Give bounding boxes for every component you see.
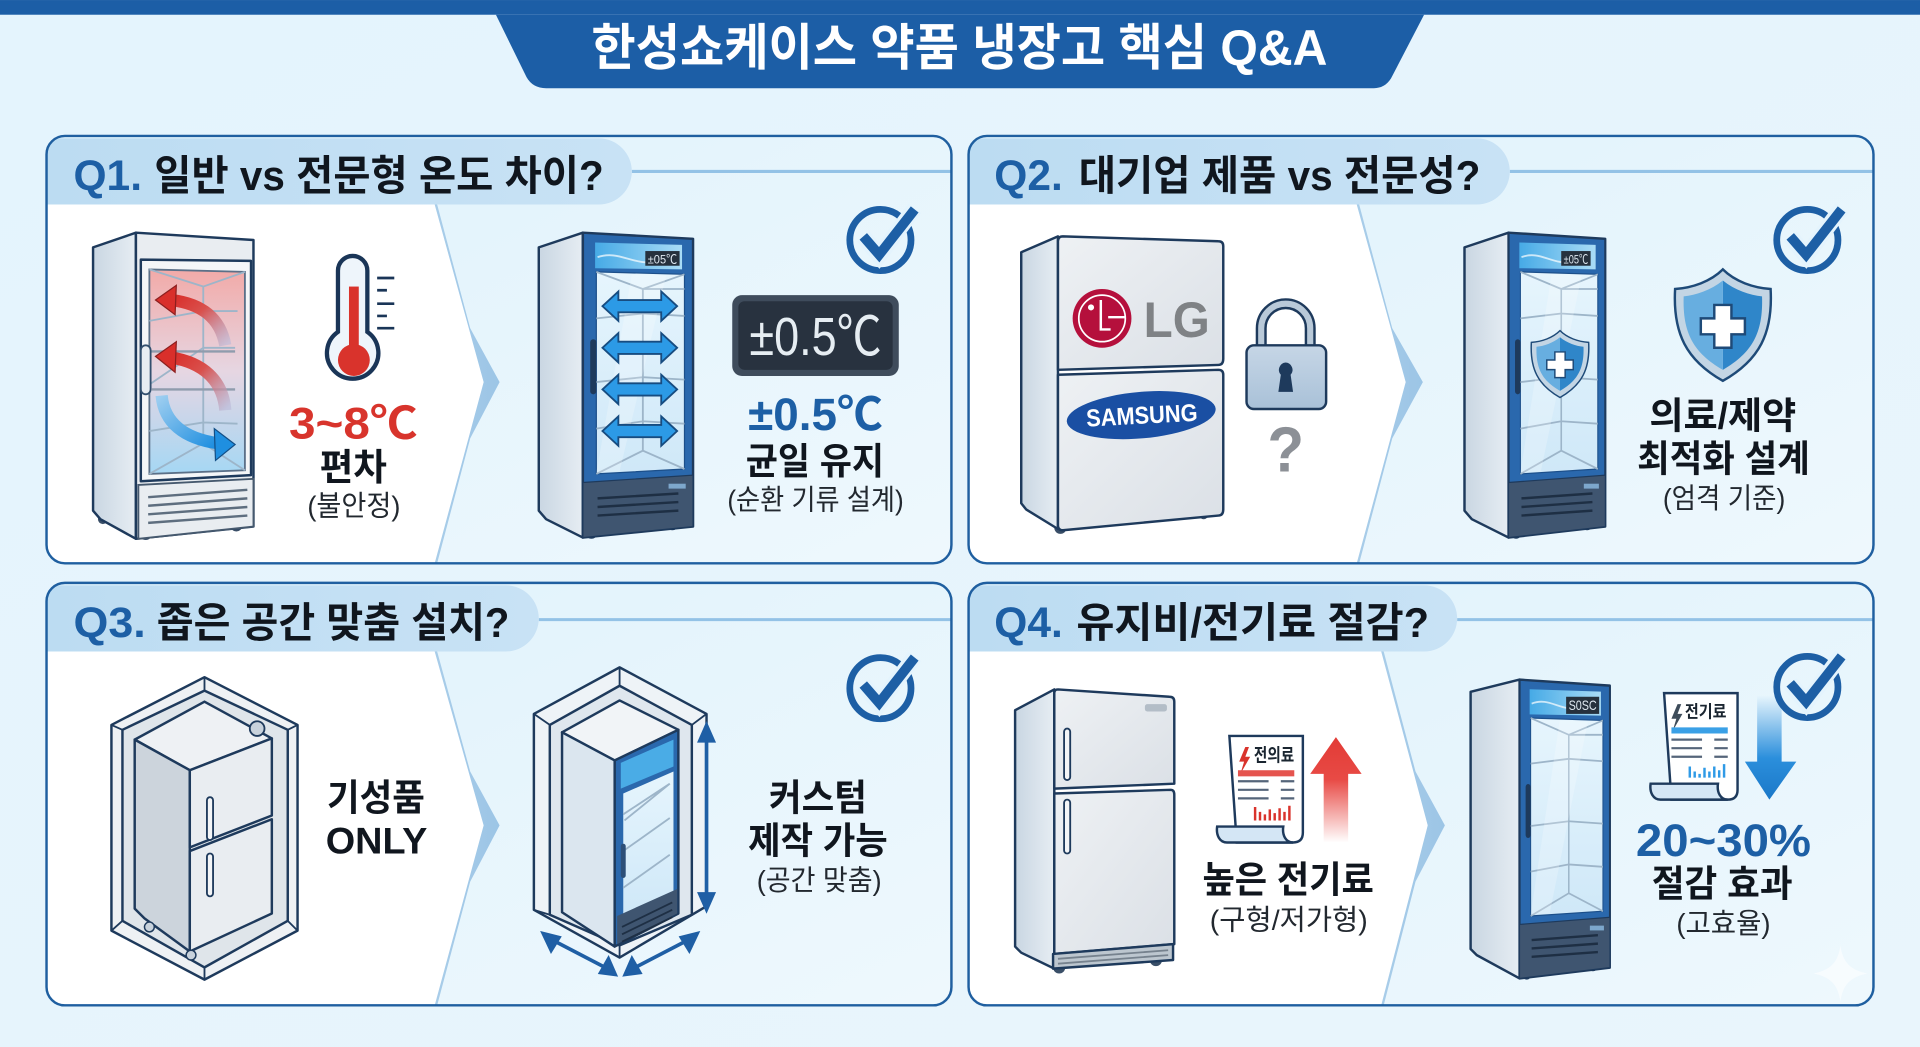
Q4 heading: 유지비/전기료 절감? (1076, 599, 1429, 646)
pharmaceutical fridge with shield (1464, 233, 1605, 539)
panel: Q2 (969, 136, 1873, 563)
right label: savings: (고효율) (1676, 908, 1771, 939)
icon: medical shield (1675, 269, 1771, 381)
left label: temperature deviation: 3~8℃ (289, 399, 418, 448)
arrow: falling cost (1745, 696, 1796, 800)
Q2 heading: Q2. (994, 152, 1063, 200)
icon: check mark (850, 208, 915, 271)
icon: check mark (850, 656, 915, 719)
high-efficiency pharmaceutical fridge: S0SC (1569, 698, 1597, 713)
airflow arrows (156, 285, 235, 460)
LG logo: LG (1144, 292, 1210, 348)
right label: medical optimized design (1637, 396, 1810, 514)
Samsung logo: SAMSUNG (1086, 400, 1198, 433)
right label: uniform temperature: ±0.5℃ (748, 389, 883, 440)
Q3 heading: Q3. (73, 599, 146, 647)
arrow: rising cost (1310, 737, 1362, 842)
digital display: ±0.5℃ (749, 307, 882, 367)
dimension arrows (541, 722, 715, 976)
icon: high electricity bill (1217, 736, 1303, 842)
panel: Q1 (47, 136, 951, 563)
icon: check mark (1777, 655, 1842, 718)
panel: Q4 (969, 583, 1873, 1005)
general fridge with uneven airflow (93, 233, 253, 540)
icon: lock with question mark (1247, 304, 1326, 485)
pharmaceutical fridge with even airflow (539, 233, 693, 539)
Q1 heading: Q1. (73, 152, 142, 200)
left label: off-the-shelf only (326, 778, 427, 862)
left label: temperature deviation: 편차 (320, 447, 387, 488)
right label: custom manufacturing: 커스텀 (769, 778, 867, 819)
icon: high electricity bill: 전의료 (1254, 745, 1294, 766)
right label: uniform temperature (727, 389, 904, 515)
icon: lock with question mark: ? (1267, 414, 1304, 485)
icon: thermometer (327, 256, 394, 379)
Q2 heading: 대기업 제품 vs 전문성? (1079, 152, 1480, 199)
right label: uniform temperature: (순환 기류 설계) (727, 484, 904, 515)
left label: high electricity cost: (구형/저가형) (1210, 904, 1368, 935)
left label: high electricity cost: 높은 전기료 (1202, 860, 1374, 901)
LG logo (1073, 289, 1210, 348)
right label: medical optimized design: 의료/제약 (1649, 396, 1796, 437)
right label: custom manufacturing: (공간 맞춤) (757, 865, 882, 896)
Samsung logo (1065, 385, 1218, 445)
left label: temperature deviation (289, 399, 418, 522)
right label: medical optimized design: (엄격 기준) (1663, 483, 1785, 514)
left label: temperature deviation: (불안정) (307, 491, 400, 522)
title text: 한성쇼케이스 약품 냉장고 핵심 Q&A (591, 20, 1327, 76)
left label: off-the-shelf only: 기성품 (327, 778, 425, 819)
icon: low electricity bill: 전기료 (1685, 702, 1727, 722)
sparkle watermark (1813, 945, 1867, 1002)
Q3 heading: 좁은 공간 맞춤 설치? (157, 599, 509, 646)
left label: high electricity cost (1202, 860, 1374, 935)
Q1 heading: 일반 vs 전문형 온도 차이? (154, 152, 604, 199)
even airflow arrows (602, 291, 677, 446)
conventional branded fridge (1021, 236, 1223, 534)
high-efficiency pharmaceutical fridge (1471, 680, 1610, 980)
right label: savings: 20~30% (1636, 815, 1811, 866)
custom fridge in niche with dimension arrows (534, 667, 715, 976)
right label: medical optimized design: 최적화 설계 (1637, 438, 1810, 479)
right label: custom manufacturing: 제작 가능 (748, 821, 888, 862)
icon: check mark (1777, 208, 1842, 271)
off-the-shelf fridge in niche (111, 677, 298, 980)
digital display (732, 295, 899, 376)
Q4 heading: Q4. (994, 599, 1063, 647)
right label: savings (1636, 815, 1811, 939)
panel: Q3 (47, 583, 951, 1005)
left label: off-the-shelf only: ONLY (326, 821, 427, 862)
icon: low electricity bill (1650, 693, 1738, 800)
pharmaceutical fridge with shield: ±05℃ (1564, 252, 1588, 266)
old low-cost fridge (1015, 689, 1174, 974)
right label: custom manufacturing (748, 778, 888, 896)
right label: uniform temperature: 균일 유지 (746, 441, 884, 482)
right label: savings: 절감 효과 (1652, 863, 1793, 904)
title banner (0, 0, 1920, 88)
pharmaceutical fridge with even airflow: ±05℃ (648, 252, 677, 266)
